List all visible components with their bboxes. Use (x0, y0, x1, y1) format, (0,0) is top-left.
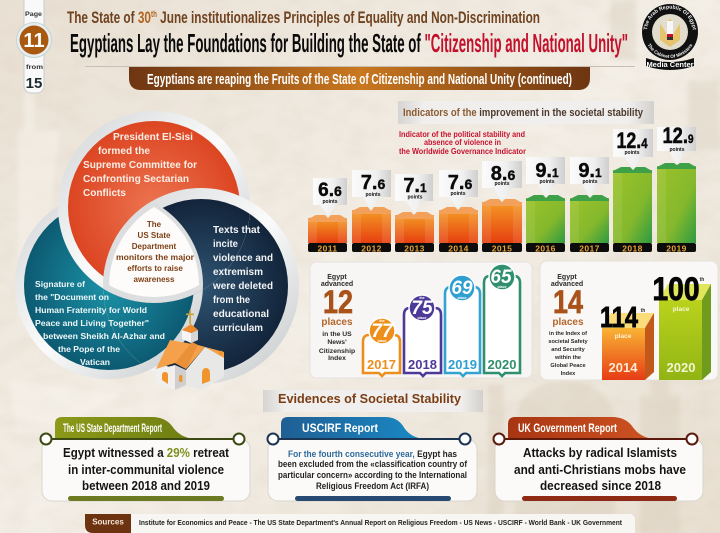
text: deleted texts: were deleted (212, 281, 273, 292)
bar 2018: 2018 (622, 244, 643, 254)
heading: evidences of societal stability (263, 390, 483, 412)
heading: societal stability indicators (398, 101, 654, 124)
text: deleted texts: from the (213, 295, 250, 306)
subtitle ribbon (85, 66, 635, 90)
text: US State Department: monitors the major (116, 253, 194, 262)
text: US State Department (116, 220, 194, 284)
text: document on human fraternity: Vatican (80, 357, 110, 367)
text: document on human fraternity: the "Document on (35, 292, 109, 302)
bar 2016: points (540, 179, 555, 185)
bar 2016: 9.1 (535, 160, 559, 182)
3d bar 2020 (652, 271, 711, 380)
text: document on human fraternity: the Pope of the (58, 344, 120, 354)
title: state of 30 June: The State of 30 (67, 8, 164, 27)
bar chart: points per year (308, 123, 696, 254)
panel: citizenship index (310, 262, 532, 378)
circle: navy (103, 188, 299, 384)
logo: media center seal: The Arab Republic Of Egypt (644, 5, 696, 30)
text: president committee (83, 132, 197, 199)
bar 2019: points (670, 147, 685, 153)
bar 2011: points (322, 199, 338, 205)
text: citizenship advance: News' (327, 339, 347, 346)
text: peace advance: and Security (551, 347, 586, 353)
logo: media center seal (642, 4, 698, 70)
text: US State Department: awareness (134, 275, 175, 284)
text: president committee: Conflicts (83, 188, 126, 199)
text: citizenship advance: in the US (322, 331, 352, 338)
logo: media center seal: The Cabinet Of Ministers (648, 43, 692, 58)
ranking 2019: 2019 (448, 357, 477, 372)
venn diagram (15, 111, 299, 390)
text: deleted texts: incite (213, 239, 238, 250)
bar 2018 (613, 128, 653, 254)
card: US State Department report: between 2018 and 2019 (82, 479, 210, 493)
ranking 2017: 77 (371, 321, 394, 342)
text: political stability indicator (399, 130, 526, 156)
bar 2016 (526, 157, 565, 254)
card: US State Department report: in inter-communital violence (68, 463, 224, 477)
overlap: navy over red (103, 188, 250, 303)
title: state of 30 June: th (151, 9, 157, 19)
text: document on human fraternity: Human Fraternity for World (35, 305, 147, 315)
text: peace advance: advanced (551, 281, 583, 288)
card: USCIRF report: been excluded from the «classification country of (278, 459, 467, 469)
bar 2019 (657, 123, 696, 254)
ranking 2020 (484, 264, 520, 376)
bar 2013: 2013 (404, 244, 425, 254)
text: US State Department: efforts to raise (127, 264, 183, 273)
3d bar 2014: 2014 (609, 360, 638, 375)
bar 2014: 2014 (448, 244, 469, 254)
page indicator (16, 0, 52, 93)
text: US State Department: US State (138, 231, 171, 240)
text: political stability indicator: the Worldwide Governance Indicator (399, 147, 526, 156)
card: UK Government report (494, 417, 703, 501)
text: citizenship advance (319, 274, 355, 362)
ranking 2018: 75 (411, 298, 433, 319)
3d bar 2020: th (700, 277, 704, 283)
card: US State Department report: Egypt witnessed a 29% retreat (63, 446, 230, 460)
center white area (109, 207, 199, 297)
sources strip: Sources (92, 518, 124, 526)
3d bar 2020: 2020 (667, 360, 695, 375)
text: citizenship advance: Citizenship (319, 348, 355, 355)
3d bar 2014 (600, 302, 654, 380)
logo: media center seal: Media Center (646, 60, 694, 69)
ranking 2020: place (498, 285, 507, 289)
bar 2014: points (450, 191, 466, 197)
3d bar 2020: place (673, 306, 690, 313)
text: US State Department: Department (132, 242, 177, 251)
heading: evidences of societal stability: Evidences of Societal Stability (278, 391, 462, 406)
center ring (103, 201, 203, 303)
text: peace advance: Egypt (557, 274, 577, 281)
text: deleted texts: curriculam (213, 323, 263, 334)
text: peace advance: 14 (553, 284, 583, 320)
card: USCIRF report: USCIRF Report (302, 423, 378, 435)
3d bar 2014: place (615, 333, 632, 340)
card: USCIRF report: particular concern» according to the International (278, 470, 467, 480)
text: citizenship advance: Egypt (327, 274, 347, 281)
bar 2019: 12.9 (662, 123, 694, 148)
panel: global peace index (540, 261, 718, 380)
text: president committee: formed the (98, 146, 150, 157)
bar 2015 (482, 161, 522, 254)
card: USCIRF report: Religious Freedom Act (IRFA) (316, 481, 429, 491)
text: deleted texts (212, 225, 273, 334)
card: US State Department report: The US State Department Report (63, 423, 162, 435)
bar 2013: points (408, 194, 423, 200)
text: peace advance: places (552, 317, 584, 328)
ranking 2018 (404, 295, 441, 376)
page indicator: from (26, 64, 43, 71)
bar 2015: points (494, 181, 510, 187)
bar 2015: 8.6 (491, 163, 515, 185)
bar 2012: 7.6 (361, 172, 385, 194)
ranking 2018: 2018 (408, 357, 437, 372)
ranking 2017 (363, 318, 400, 376)
ranking 2017: 2017 (367, 357, 396, 372)
text: president committee: President El-Sisi (113, 132, 193, 143)
bar 2018: points (624, 150, 640, 156)
text: president committee: Supreme Committee for (83, 160, 197, 171)
title: state of 30 June: June institutionalizes Principles of Equality and Non-Discrimination (157, 8, 540, 27)
ranking 2017: place (378, 339, 387, 343)
text: political stability indicator: Indicator of the political stability and (399, 130, 525, 139)
bar 2014 (439, 170, 478, 254)
text: document on human fraternity: between Sheikh Al-Azhar and (43, 331, 165, 341)
text: deleted texts: extremism (213, 267, 263, 278)
text: peace advance: Index (561, 371, 576, 377)
text: document on human fraternity: Signature of (35, 279, 85, 289)
bar 2015: 2015 (492, 244, 512, 254)
bar 2018: 12.4 (616, 128, 648, 153)
text: citizenship advance: places (321, 317, 353, 328)
text: peace advance: within the (554, 355, 581, 361)
ranking 2019: place (458, 296, 467, 300)
card: UK Government report: and anti-Christians mobs have (514, 463, 686, 477)
text: peace advance: Global Peace (550, 363, 586, 369)
page indicator: 15 (26, 75, 42, 92)
bar 2014: 7.6 (448, 172, 472, 194)
bar 2017 (570, 157, 609, 254)
text: deleted texts: educational (213, 309, 269, 320)
text: citizenship advance: 12 (323, 284, 353, 320)
3d bar 2014: 114 (600, 302, 638, 334)
bar 2012: 2012 (361, 244, 382, 254)
bar 2017: 2017 (579, 244, 600, 254)
3d bar 2020: 100 (652, 271, 700, 307)
ranking 2017: the (379, 319, 385, 323)
circle: red (58, 111, 250, 303)
bar 2017: points (582, 179, 598, 185)
icon: church (156, 310, 224, 390)
ranking 2020: 2020 (488, 357, 516, 372)
ranking 2019 (445, 275, 480, 376)
text: citizenship advance: advanced (321, 281, 353, 288)
ranking 2019: 69 (451, 278, 473, 299)
text: president committee: Confronting Sectarian (83, 174, 189, 185)
text: political stability indicator: absence of violence in (424, 138, 501, 147)
bar 2019: 2019 (666, 244, 687, 254)
card: UK Government report: Attacks by radical Islamists (523, 446, 677, 460)
ranking 2018: the (419, 296, 425, 300)
ranking 2020: 65 (490, 267, 512, 288)
card: US State Department report (40, 417, 250, 501)
page indicator: 11 (23, 30, 45, 52)
text: peace advance: in the Index of (549, 331, 587, 337)
bar 2011: 6.6 (318, 180, 342, 201)
text: document on human fraternity (35, 279, 165, 367)
card: UK Government report: decreased since 2018 (540, 479, 661, 493)
text: document on human fraternity: Peace and Living Together" (35, 318, 149, 328)
card: USCIRF report (268, 417, 477, 501)
circle: teal (15, 191, 203, 379)
heading: societal stability indicators: Indicators of the improvement in the societal stability (403, 107, 644, 119)
ranking 2018: place (418, 316, 427, 320)
3d bar 2014: th (641, 308, 645, 314)
text: citizenship advance: Index (328, 355, 346, 362)
bar 2011 (308, 178, 347, 254)
bar 2013: 7.1 (403, 175, 427, 197)
text: deleted texts: violence and (213, 253, 273, 264)
text: US State Department: The (147, 220, 162, 229)
text: peace advance: societal Safety (548, 339, 588, 345)
bar 2012 (352, 170, 391, 254)
text: peace advance (548, 274, 588, 377)
sources strip: Institute for Economics and Peace - The US State Department's Annual Report on Religious Freedom - US News - USCIRF - World Bank - UK Government (139, 518, 622, 527)
bar 2017: 9.1 (578, 160, 602, 182)
bar 2011: 2011 (317, 244, 338, 254)
text: deleted texts: Texts that (213, 225, 261, 236)
bar 2012: points (366, 192, 381, 198)
card: UK Government report: UK Government Report (518, 423, 617, 435)
bar 2013 (395, 174, 434, 254)
card: USCIRF report: For the fourth consecutive year, Egypt has (288, 449, 457, 459)
sources strip (85, 514, 635, 533)
bar 2016: 2016 (535, 244, 556, 254)
overlap: teal over navy (103, 288, 203, 370)
page indicator: Page (25, 11, 42, 18)
